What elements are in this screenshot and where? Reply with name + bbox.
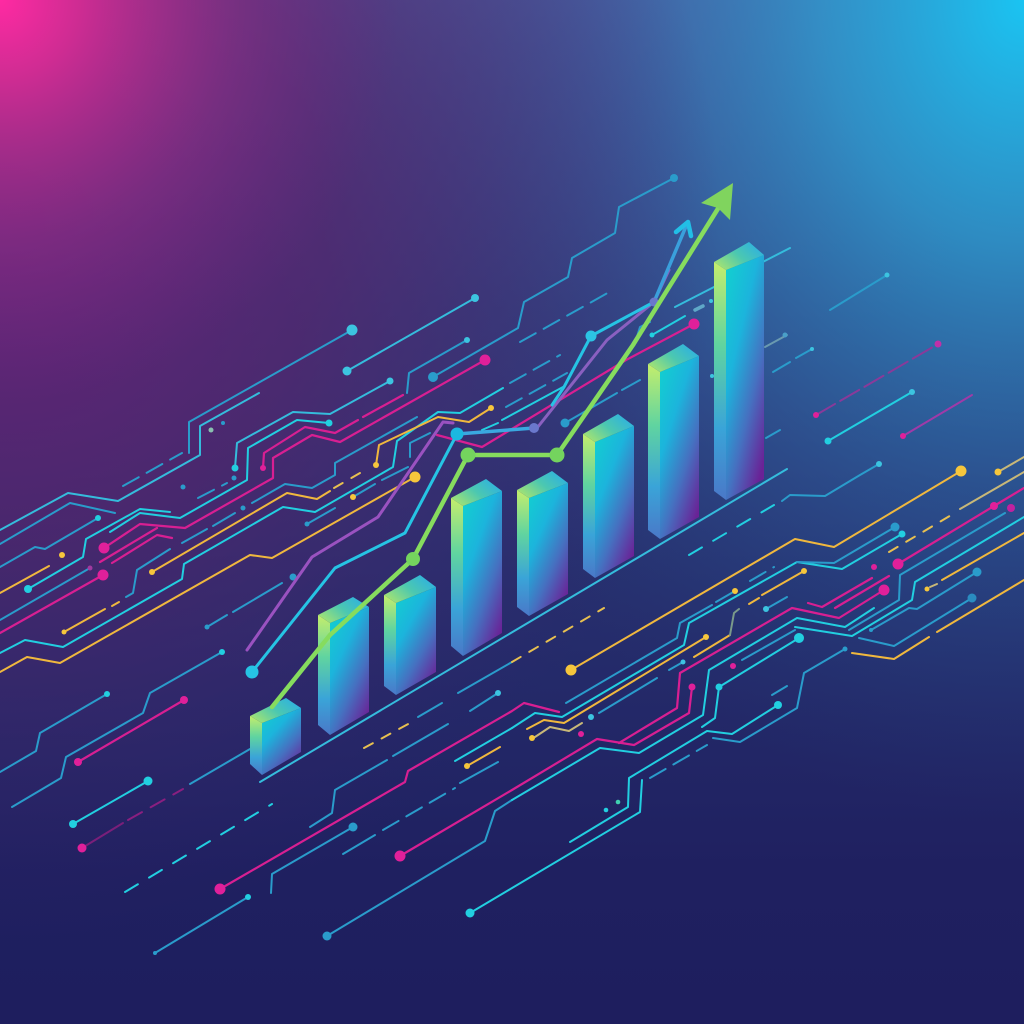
bar chart: eight isometric bars xyxy=(250,242,764,775)
circuit traces: lower left xyxy=(0,608,874,955)
purple trend line xyxy=(247,270,669,650)
green growth line with arrow xyxy=(272,183,733,707)
bar 3 xyxy=(384,575,436,695)
circuit traces: upper left xyxy=(0,174,685,672)
magenta trend line xyxy=(437,318,700,447)
bar 6 xyxy=(583,414,634,578)
bar 8 xyxy=(714,242,764,500)
bar 2 xyxy=(318,597,369,735)
circuit traces: lower right xyxy=(260,457,1024,782)
cyan trend line with arrow xyxy=(246,222,691,678)
bar 5 xyxy=(517,471,568,616)
circuit traces: upper right xyxy=(675,248,972,444)
bar 4 xyxy=(451,479,502,656)
bar 1 xyxy=(250,698,301,775)
bar 7 xyxy=(648,344,699,539)
